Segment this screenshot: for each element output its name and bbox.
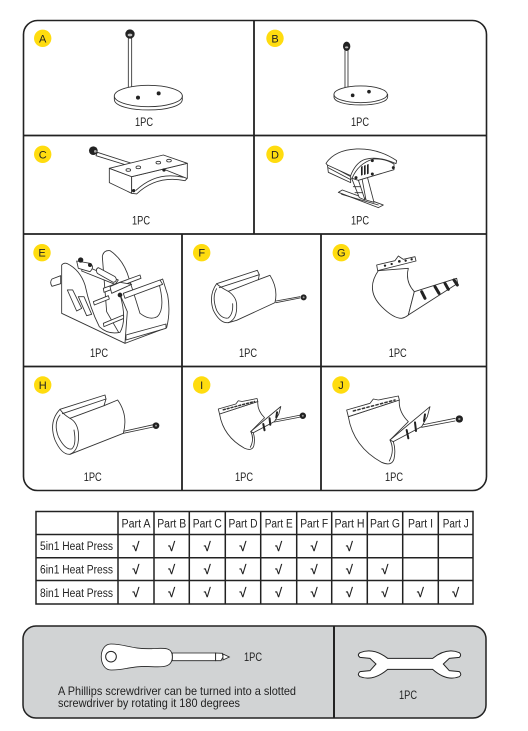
row headers: 5in1 Heat Press (40, 541, 113, 553)
label: 1PC: 1PC (389, 346, 407, 360)
badge: B (266, 30, 284, 47)
check marks: √ (346, 585, 354, 600)
label: 1PC: 1PC (84, 470, 102, 484)
row headers (40, 541, 113, 600)
check marks: √ (452, 585, 460, 600)
compatibility table (36, 512, 473, 604)
icon: screwdriver (101, 644, 229, 670)
icon: large heating cylinder (53, 395, 159, 454)
label: 1PC: 1PC (351, 115, 369, 129)
row headers: 6in1 Heat Press (40, 564, 113, 576)
column headers: Part H (334, 518, 364, 530)
badge: H: H (39, 380, 47, 392)
badge: A: A (39, 33, 47, 45)
badge: J: J (338, 380, 344, 392)
icon: small open wrap (218, 398, 306, 449)
panel: part A (24, 21, 254, 135)
label: 1PC: 1PC (90, 346, 108, 360)
check marks: √ (168, 539, 176, 554)
check marks: √ (132, 585, 140, 600)
icon: small base plate with rod (334, 42, 388, 105)
column headers: Part A (122, 518, 151, 530)
label: 1PC: 1PC (135, 115, 153, 129)
panel: part H (24, 366, 182, 490)
panel: part E (24, 234, 182, 366)
check marks: √ (204, 562, 212, 577)
icon: curved press head on stand (326, 149, 397, 208)
check marks: √ (381, 562, 389, 577)
icon: large base plate with rod (114, 29, 182, 110)
check marks: √ (275, 539, 283, 554)
check marks: √ (346, 562, 354, 577)
check marks: √ (381, 585, 389, 600)
check marks: √ (168, 585, 176, 600)
panel: part F (182, 234, 321, 366)
check marks: √ (239, 585, 247, 600)
badge: F: F (198, 248, 205, 260)
check marks: √ (275, 585, 283, 600)
screwdriver note: A Phillips screwdriver can be turned into a slotted (58, 684, 296, 698)
check marks: √ (132, 539, 140, 554)
check marks: √ (346, 539, 354, 554)
badge: A (34, 30, 51, 47)
column headers: Part G (370, 518, 400, 530)
check marks: √ (311, 585, 319, 600)
panel: parts grid (23, 20, 487, 491)
icon: mug press block (89, 146, 187, 194)
badge: D (266, 146, 284, 163)
column headers: Part B (157, 518, 186, 530)
badge: C (34, 146, 51, 163)
badge: B: B (271, 33, 279, 45)
check marks: √ (204, 539, 212, 554)
screwdriver note: screwdriver by rotating it 180 degrees (58, 696, 240, 710)
column headers: Part F (300, 518, 328, 530)
check marks: √ (204, 585, 212, 600)
panel: part B (254, 21, 486, 135)
column headers: Part J (443, 518, 469, 530)
icon: wrench (358, 651, 461, 678)
badge: G: G (337, 248, 346, 260)
check marks: √ (311, 539, 319, 554)
check marks: √ (239, 562, 247, 577)
badge: D: D (271, 149, 279, 161)
badge: J (332, 376, 350, 394)
panel: part J (321, 366, 486, 490)
check marks: √ (168, 562, 176, 577)
icon: open heating wrap (372, 256, 458, 318)
column headers: Part I (408, 518, 433, 530)
screwdriver note (58, 684, 296, 710)
check marks: √ (417, 585, 425, 600)
check marks: √ (239, 539, 247, 554)
icon: large open wrap (347, 396, 463, 464)
label: 1PC: 1PC (239, 346, 257, 360)
check marks (132, 539, 460, 600)
column headers (122, 518, 469, 530)
check marks: √ (132, 562, 140, 577)
badge: E (33, 244, 51, 261)
label: screwdriver 1PC: 1PC (244, 650, 262, 664)
column headers: Part E (265, 518, 293, 530)
panel: part C (24, 135, 254, 234)
label: 1PC: 1PC (235, 470, 253, 484)
label: wrench 1PC: 1PC (399, 688, 417, 702)
label: 1PC: 1PC (132, 214, 150, 228)
panel: part I (182, 366, 321, 490)
panel: part G (321, 234, 486, 366)
column headers: Part C (193, 518, 222, 530)
check marks: √ (311, 562, 319, 577)
table grid (36, 512, 473, 604)
column headers: Part D (228, 518, 258, 530)
badge: C: C (39, 149, 47, 161)
label: 1PC: 1PC (385, 470, 403, 484)
icon: mug press frame (51, 251, 169, 343)
panel: part D (254, 135, 486, 234)
badge: H (34, 376, 51, 394)
badge: G (333, 244, 350, 261)
panel: tools (23, 626, 486, 718)
label: 1PC: 1PC (351, 214, 369, 228)
row headers: 8in1 Heat Press (40, 588, 113, 600)
icon: small heating cylinder (211, 270, 307, 323)
badge: I: I (200, 380, 203, 392)
badge: E: E (38, 248, 46, 260)
check marks: √ (275, 562, 283, 577)
